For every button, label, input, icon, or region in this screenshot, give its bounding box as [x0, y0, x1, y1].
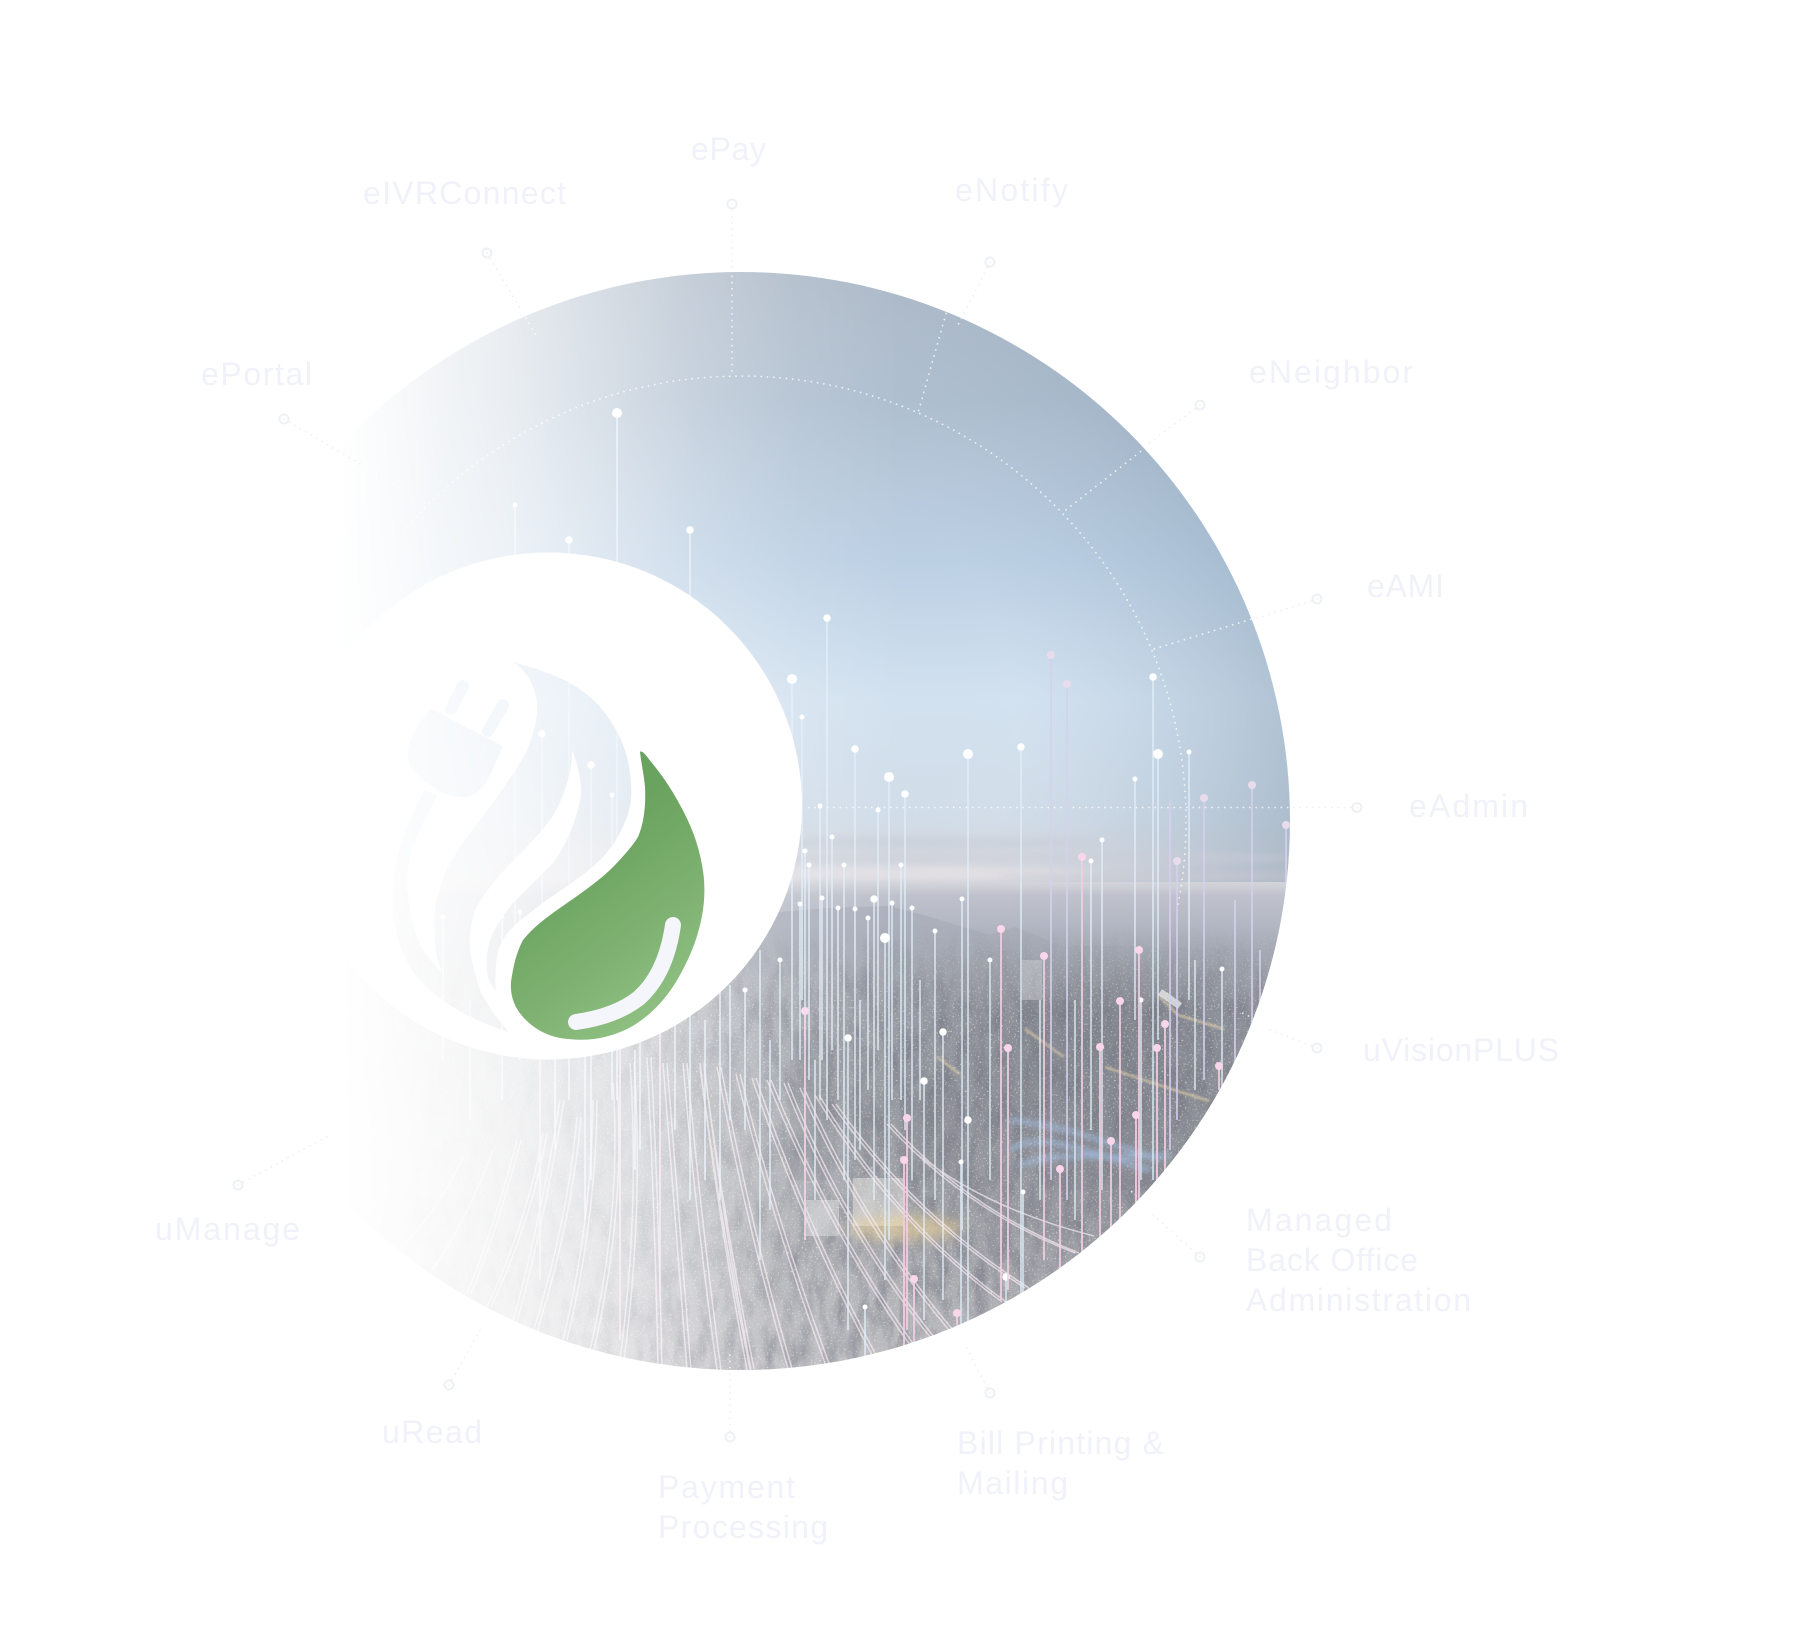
city texture: [546, 940, 1275, 1370]
icon: green leaf drop: [511, 751, 704, 1040]
label: ePortal: ePortal: [201, 356, 312, 392]
label: uManage: uManage: [155, 1211, 300, 1247]
label: Payment Processing: [658, 1432, 828, 1545]
dotted orbit arc and spokes inside the photo: [434, 276, 1288, 1368]
label: eIVRConnect: [363, 175, 566, 258]
distant mountains: [776, 906, 956, 926]
label: ePortal: [201, 356, 312, 424]
label: eNotify: eNotify: [955, 172, 1068, 208]
label: eIVRConnect: eIVRConnect: [363, 175, 566, 211]
lavender data pillars: [1051, 655, 1286, 1200]
label: uManage: [155, 1180, 300, 1247]
tower blocks: [790, 1000, 1160, 1190]
label: Bill Printing & Mailing: Bill Printing &: [957, 1425, 1164, 1461]
label: uVisionPLUS: uVisionPLUS: [1363, 1032, 1559, 1068]
label: Payment Processing: Payment: [658, 1469, 795, 1505]
label: ePay: [691, 131, 766, 208]
label: eAMI: [1312, 568, 1444, 604]
label: Managed Back Office Administration: [1196, 1202, 1471, 1318]
label: Managed Back Office Administration: Administration: [1246, 1282, 1471, 1318]
panel: circular city skyline photo fading to white at left: [404, 272, 1290, 1370]
blue and white data pillars: [443, 413, 1222, 1360]
outer dotted connectors: [238, 204, 1357, 1437]
leaf highlight: [576, 925, 673, 1022]
horizon cloud bands: [660, 836, 1360, 881]
logo: white badge with plug and flame cut-outs: [423, 552, 802, 1060]
label: eAMI: eAMI: [1367, 568, 1444, 604]
pale wash over the lower-left of the photo: [422, 936, 769, 1364]
label: eAdmin: [1352, 788, 1528, 824]
label: Managed Back Office Administration: Back Office: [1246, 1242, 1418, 1278]
label: eNotify: [955, 172, 1068, 266]
label: eNeighbor: eNeighbor: [1249, 354, 1413, 390]
lit buildings and streets: [805, 960, 1224, 1241]
pink data pillars: [540, 857, 1219, 1350]
sky vignette: [628, 272, 1290, 882]
label: eAdmin: eAdmin: [1409, 788, 1528, 824]
label: Managed Back Office Administration: Managed: [1246, 1202, 1392, 1238]
sky and city base gradient: [434, 272, 1290, 1370]
label: Payment Processing: Processing: [658, 1509, 828, 1545]
label: ePay: ePay: [691, 131, 766, 167]
label: uRead: [382, 1380, 482, 1450]
label: uRead: uRead: [382, 1414, 482, 1450]
label: Bill Printing & Mailing: Mailing: [957, 1465, 1068, 1501]
label: Bill Printing & Mailing: [957, 1388, 1164, 1501]
label: eNeighbor: [1196, 354, 1413, 410]
perspective light trails: [496, 1057, 1094, 1370]
